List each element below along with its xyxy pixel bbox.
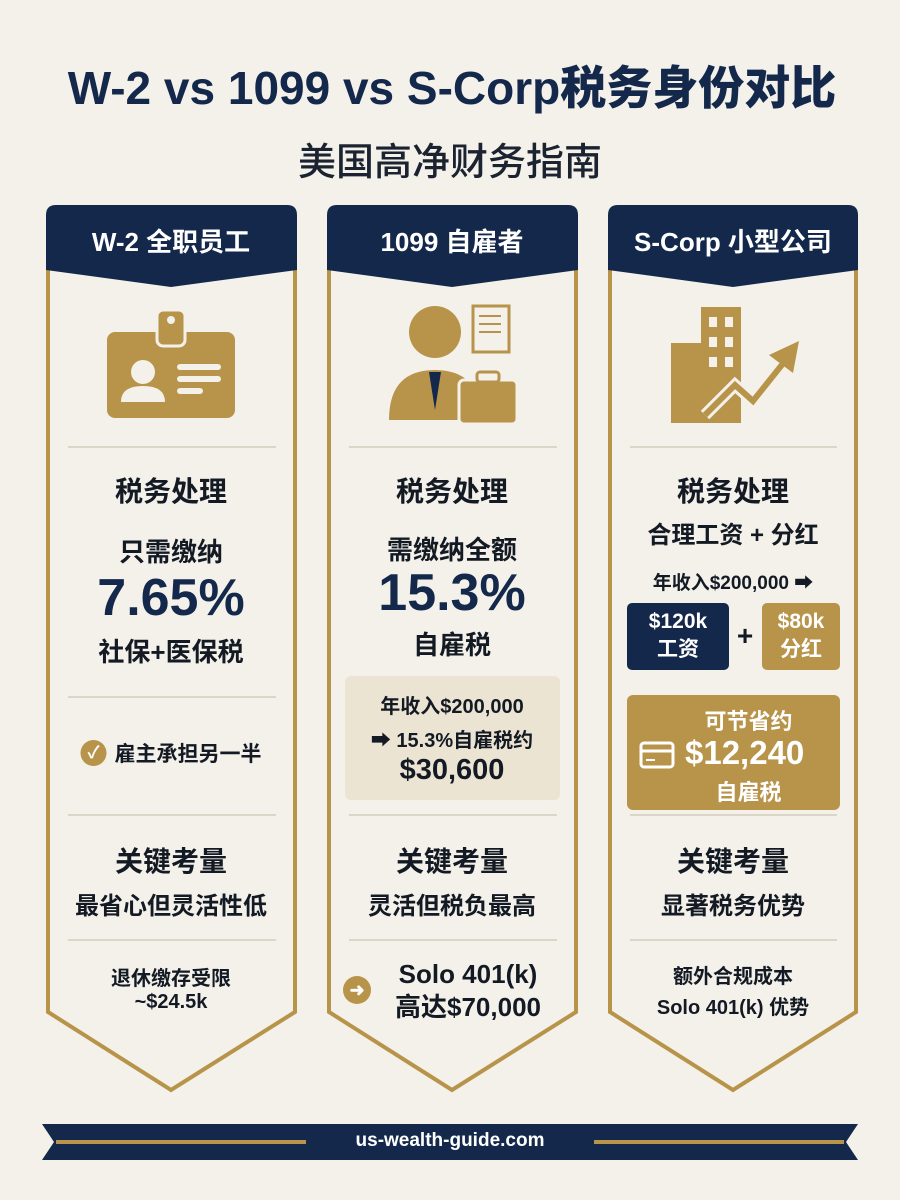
text: 自雇税 [413,630,491,660]
dividend box: 分红 [780,638,822,661]
panel 2 tax: 税务处理 [396,476,508,507]
text: us-wealth-guide.com [356,1130,544,1151]
panel 1 key: 关键考量 [115,846,227,877]
text: 15.3% [378,564,526,622]
text: 年收入$200,000 [380,696,524,718]
text: 合理工资 + 分红 [647,522,819,549]
text: 高达$70,000 [395,992,541,1022]
panel 3 tax: 税务处理 [677,476,789,507]
footer banner [42,1124,858,1160]
check note: 雇主承担另一半 [114,743,262,766]
text: 只需缴纳 [119,537,223,567]
text: 需缴纳全额 [387,535,517,565]
text: ~$24.5k [135,991,207,1013]
savings box [627,695,840,810]
text: 年收入$200,000 ➡ [653,573,813,594]
text: 退休缴存受限 [111,968,231,990]
title: W-2 vs 1099 vs S-Corp税务身份对比 [68,62,836,114]
header: W-2: W-2 全职员工 [92,227,250,257]
text: 显著税务优势 [661,893,805,920]
arrow icon: ➜ [349,980,365,1000]
icon: person with briefcase [389,304,516,422]
text: Solo 401(k) 优势 [657,997,809,1019]
savings box: 可节省约 [704,709,792,734]
text: ➡ 15.3%自雇税约 [371,730,533,752]
subtitle: 美国高净财务指南 [298,142,602,184]
text: 7.65% [97,569,245,627]
savings box: $12,240 [685,734,804,771]
salary box: $120k [649,610,707,633]
check note: ✓ [87,743,100,762]
icon: id badge [107,312,235,418]
header: 1099: 1099 自雇者 [380,227,524,257]
text: $30,600 [400,754,504,786]
example box [345,676,560,800]
savings box: 自雇税 [715,780,782,805]
text: 最省心但灵活性低 [75,893,267,920]
icon: building with arrow [671,307,799,423]
text: 额外合规成本 [673,966,793,988]
header: S-Corp: S-Corp 小型公司 [634,227,832,257]
text: 灵活但税负最高 [368,893,536,920]
panel 2 key: 关键考量 [396,846,508,877]
salary box [627,603,729,670]
text: 社保+医保税 [98,637,244,667]
panel 1 tax: 税务处理 [115,476,227,507]
text: Solo 401(k) [399,959,537,989]
dividend box [762,603,840,670]
dividend box: $80k [778,610,824,633]
panel 3 key: 关键考量 [677,846,789,877]
arrow icon [343,976,371,1004]
text: + [737,620,753,651]
salary box: 工资 [657,638,699,661]
